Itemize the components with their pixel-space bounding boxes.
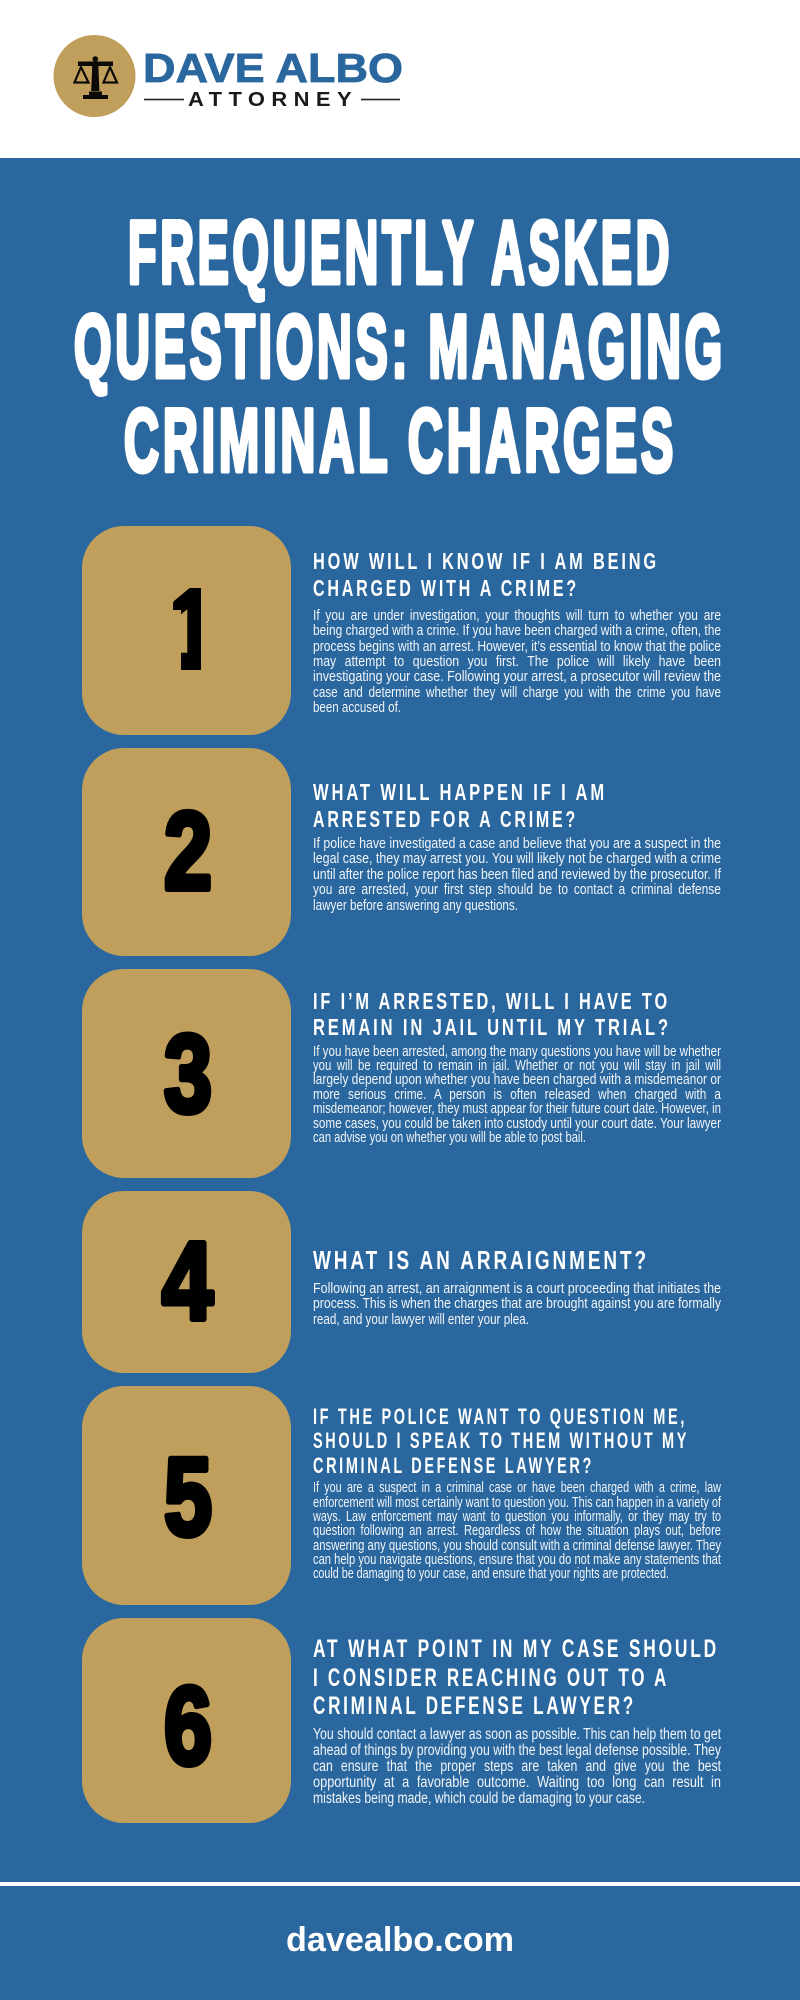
body text 2: until after the police report has been filed and reviewed by the prosecutor. If	[313, 867, 722, 883]
heading 3: REMAIN IN JAIL UNTIL MY TRIAL?	[313, 1014, 671, 1040]
body text 6: mistakes being made, which could be damaging to your case.	[313, 1790, 645, 1807]
footer website: davealbo.com	[286, 1921, 514, 1959]
number badge 4: 4	[162, 1220, 213, 1343]
body text 5: could be damaging to your case, and ensure that your rights are protected.	[313, 1566, 669, 1582]
heading 1: CHARGED WITH A CRIME?	[313, 575, 579, 601]
body text 3: more serious crime. A person is often released when charged with a	[313, 1087, 722, 1103]
number badge 1	[82, 526, 291, 735]
body text 1: may attempt to question you first. The police will likely have been	[313, 654, 721, 670]
number badge 3: 3	[164, 1013, 212, 1136]
body text 3: largely depend upon whether you have been charged with a misdemeanor or	[313, 1072, 721, 1088]
body text 2: legal case, they may arrest you. You will likely not be charged with a crime	[313, 851, 721, 867]
logo wordmark: DAVE ALBO	[143, 45, 403, 91]
body text 2	[313, 836, 722, 914]
header band	[0, 0, 800, 158]
body text 3	[313, 1044, 722, 1146]
body text 1: process begins with an arrest. However, it’s essential to know that the police	[313, 639, 721, 655]
heading 6: CRIMINAL DEFENSE LAWYER?	[313, 1692, 636, 1720]
heading 5: CRIMINAL DEFENSE LAWYER?	[313, 1453, 594, 1478]
body text 4: process. This is when the charges that are brought against you are formally	[313, 1296, 722, 1312]
logo subline: ATTORNEY	[188, 88, 358, 111]
panel: question 3	[82, 969, 722, 1178]
number badge 2: 2	[164, 790, 212, 913]
panel: question 1	[82, 526, 721, 735]
body text 3: can advise you on whether you will be able to post bail.	[313, 1130, 586, 1146]
panel: question 4	[82, 1191, 722, 1373]
body text 1	[313, 608, 721, 716]
body text 6	[313, 1726, 722, 1807]
body text 4: Following an arrest, an arraignment is a court proceeding that initiates the	[313, 1281, 721, 1297]
body text 1: investigating your case. Following your arrest, a prosecutor will review the	[313, 669, 721, 685]
body text 2: you are arrested, your first step should be to contact a criminal defense	[313, 882, 721, 898]
number badge 6: 6	[164, 1665, 212, 1788]
body text 2: lawyer before answering any questions.	[313, 898, 518, 914]
body text 4	[313, 1281, 722, 1328]
logo: Dave Albo Attorney	[54, 35, 403, 117]
body text 2: If police have investigated a case and believe that you are a suspect in the	[313, 836, 721, 852]
body text 5	[312, 1480, 722, 1582]
heading 2: WHAT WILL HAPPEN IF I AM	[313, 779, 607, 805]
number badge 1: 1	[170, 568, 218, 691]
number badge 5: 5	[164, 1436, 212, 1559]
heading 2: ARRESTED FOR A CRIME?	[313, 806, 578, 832]
body text 6: opportunity at a favorable outcome. Waiting too long can result in	[313, 1774, 721, 1791]
number badge 2	[82, 748, 291, 956]
panel: question 5	[82, 1386, 722, 1605]
number badge 5	[82, 1386, 291, 1605]
heading 5	[313, 1404, 689, 1478]
body text 4: read, and your lawyer will enter your plea.	[313, 1312, 529, 1328]
body text 1: being charged with a crime. If you have been charged with a crime, often, the	[313, 623, 721, 639]
number badge 3	[82, 969, 291, 1178]
panel: question 6	[82, 1618, 722, 1823]
heading 1	[313, 548, 659, 601]
number badge 6	[82, 1618, 291, 1823]
title	[74, 202, 726, 490]
footer	[0, 1882, 800, 1959]
heading 6	[313, 1635, 719, 1720]
heading 1: HOW WILL I KNOW IF I AM BEING	[313, 548, 659, 574]
panel: question 2	[82, 748, 722, 956]
number badge 4	[82, 1191, 291, 1373]
body text 1: been accused of.	[313, 700, 401, 716]
body text 1: If you are under investigation, your thoughts will turn to whether you are	[313, 608, 721, 624]
heading 2	[313, 779, 607, 832]
heading 4: WHAT IS AN ARRAIGNMENT?	[313, 1245, 649, 1275]
icon: gold circle with scales of justice	[54, 35, 136, 117]
heading 3	[313, 988, 671, 1040]
